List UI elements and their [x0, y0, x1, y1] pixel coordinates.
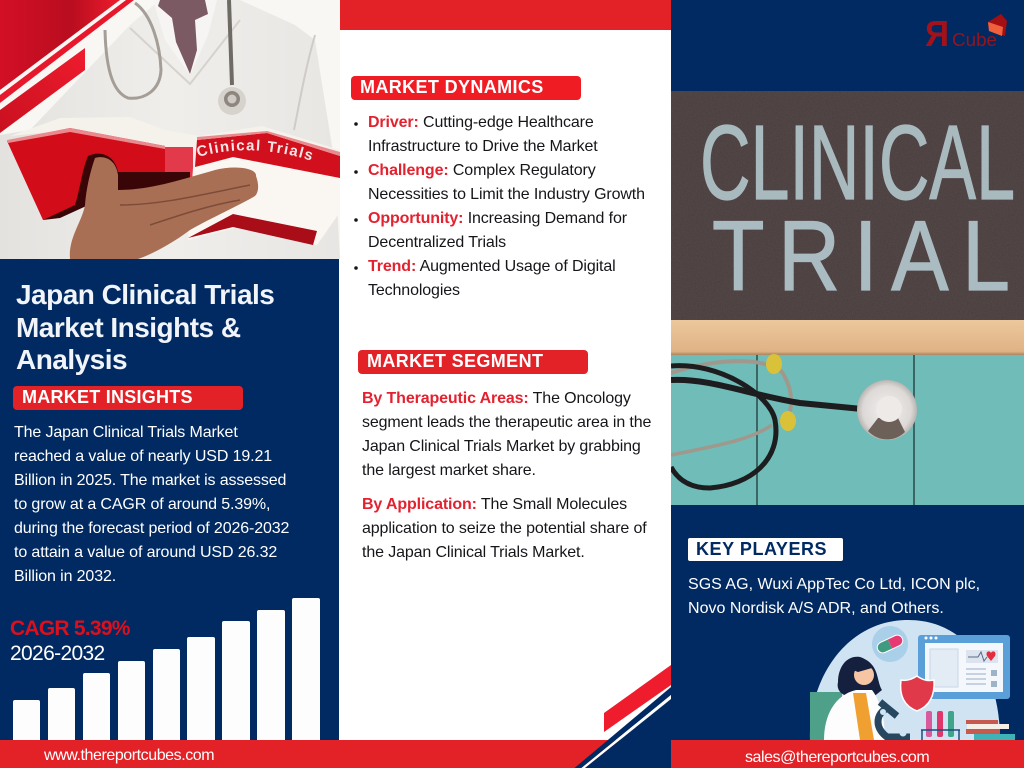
text: CAGR value: CAGR 5.39% — [10, 617, 130, 640]
heading: market segment: MARKET SEGMENT — [367, 351, 543, 371]
text: therapeutic areas: segment leads the therapeutic area in the — [362, 414, 651, 431]
photo: clinical trial chalkboard with stethoscope — [671, 91, 1024, 505]
title — [16, 279, 274, 375]
text: email: sales@thereportcubes.com — [745, 749, 929, 766]
panel: left column background — [0, 259, 339, 740]
bar chart: CAGR growth — [13, 598, 320, 740]
list: market dynamics: Decentralized Trials — [368, 234, 506, 251]
shield icon — [901, 676, 934, 711]
text: CAGR period: 2026-2032 — [10, 642, 105, 665]
report window — [918, 635, 1010, 699]
text: market insights body — [14, 424, 289, 585]
text: market insights body: reached a value of nearly USD 19.21 — [14, 448, 272, 465]
footer: right red bar — [671, 740, 1024, 768]
list: market dynamics: Necessities to Limit the Industry Growth — [368, 186, 645, 203]
bullets — [354, 122, 358, 270]
pill icon — [872, 626, 908, 662]
heading: key players: KEY PLAYERS — [696, 539, 827, 559]
title: Market Insights & — [16, 312, 241, 342]
text: therapeutic areas: By Therapeutic Areas: The Oncology — [362, 390, 631, 407]
logo: RCube: Cube — [952, 30, 997, 50]
text: market insights body: The Japan Clinical Trials Market — [14, 424, 238, 441]
heading: market insights: MARKET INSIGHTS — [22, 387, 193, 407]
list: market dynamics — [368, 114, 645, 299]
footer: left red bar — [0, 740, 671, 768]
panel: right column background — [671, 0, 1024, 740]
woman scientist — [824, 657, 884, 740]
decorative corner chevrons — [574, 665, 671, 768]
heading: market segment — [358, 350, 588, 374]
list: market dynamics: Technologies — [368, 282, 460, 299]
text: market insights body: Billion in 2025. The market is assessed — [14, 472, 286, 489]
text: application — [362, 496, 647, 561]
text: key players list — [688, 576, 980, 617]
heading: market dynamics — [351, 76, 581, 100]
text: market insights body: to grow at a CAGR of around 5.39%, — [14, 496, 270, 513]
heading: market dynamics: MARKET DYNAMICS — [360, 77, 544, 97]
list: market dynamics: Driver: Cutting-edge Healthcare — [368, 114, 594, 131]
list: market dynamics: Trend: Augmented Usage of Digital — [368, 258, 616, 275]
title: Analysis — [16, 344, 127, 375]
text: application: application to seize the potential share of — [362, 520, 647, 537]
logo: RCube — [925, 13, 1007, 52]
test tubes — [921, 711, 960, 740]
text: application: By Application: The Small Molecules — [362, 496, 627, 513]
book title: Clinical Trials — [197, 140, 312, 160]
text: therapeutic areas: the largest market share. — [362, 462, 536, 479]
text: therapeutic areas: Japan Clinical Trials Market by grabbing — [362, 438, 641, 455]
list: market dynamics: Challenge: Complex Regulatory — [368, 162, 596, 179]
list: market dynamics: Opportunity: Increasing Demand for — [368, 210, 627, 227]
title: Japan Clinical Trials — [16, 279, 274, 310]
heading: market insights — [13, 386, 243, 410]
stacked books — [966, 720, 1015, 740]
text: application: the Japan Clinical Trials Market. — [362, 544, 585, 561]
chalk word: trial: TRIAL — [712, 200, 1010, 311]
decorative red stripes — [0, 0, 134, 133]
text: market insights body: Billion in 2032. — [14, 568, 116, 585]
text: therapeutic areas — [362, 390, 651, 479]
text: market insights body: to attain a value of around USD 26.32 — [14, 544, 277, 561]
photo: doctor holding clinical trials book — [0, 0, 340, 259]
text: website: www.thereportcubes.com — [44, 747, 214, 764]
text: key players list: Novo Nordisk A/S ADR, and Others. — [688, 600, 944, 617]
text: market insights body: during the forecast period of 2026-2032 — [14, 520, 289, 537]
centre top red bar — [339, 0, 671, 30]
list: market dynamics: Infrastructure to Drive the Market — [368, 138, 598, 155]
illustration: scientist with microscope and report — [810, 620, 1015, 740]
microscope — [878, 702, 910, 740]
text: key players list: SGS AG, Wuxi AppTec Co Ltd, ICON plc, — [688, 576, 980, 593]
